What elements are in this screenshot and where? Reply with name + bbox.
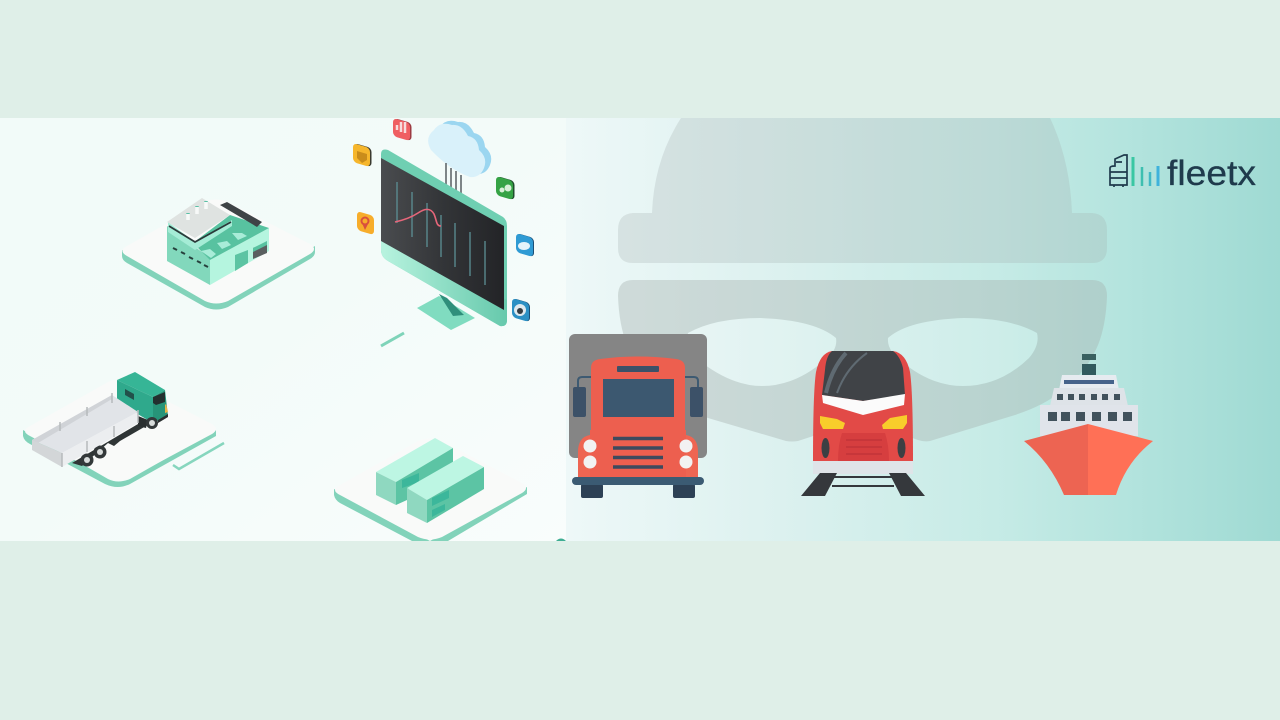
road marker below monitor bbox=[381, 333, 404, 346]
icon: cloud bbox=[428, 121, 491, 193]
road marker near truck bbox=[173, 443, 224, 469]
icon: cloud app bbox=[516, 233, 534, 257]
icon: location pin app bbox=[357, 211, 374, 235]
platform: factory bbox=[122, 246, 315, 310]
floating app icons bbox=[353, 118, 534, 322]
platform: truck bbox=[23, 430, 216, 487]
logo: fleetx bbox=[1109, 154, 1256, 187]
icon: factory building bbox=[167, 198, 269, 285]
icon: red truck bbox=[569, 334, 707, 498]
icon: shield app bbox=[353, 143, 372, 167]
platform: containers bbox=[334, 487, 527, 541]
icon: cruise ship bbox=[1024, 354, 1153, 495]
icon: shipping containers bbox=[376, 438, 484, 523]
spy silhouette bbox=[618, 118, 1107, 442]
icon: red train bbox=[801, 351, 925, 496]
icon: truck bbox=[32, 372, 168, 467]
mask bbox=[618, 280, 1107, 442]
logo wordmark: fleetx bbox=[1167, 154, 1257, 193]
right panel: spy background bbox=[566, 118, 1280, 541]
infographic canvas bbox=[0, 118, 1280, 541]
icon: link app bbox=[496, 176, 514, 200]
icon: logo truck and bars bbox=[1110, 155, 1158, 187]
icon: monitor bbox=[381, 150, 507, 330]
left panel: isometric logistics scene bbox=[0, 118, 566, 541]
icon: globe app bbox=[512, 298, 530, 322]
icon: chart app bbox=[393, 118, 412, 141]
hat bbox=[618, 118, 1107, 263]
corner marker bbox=[556, 538, 566, 541]
